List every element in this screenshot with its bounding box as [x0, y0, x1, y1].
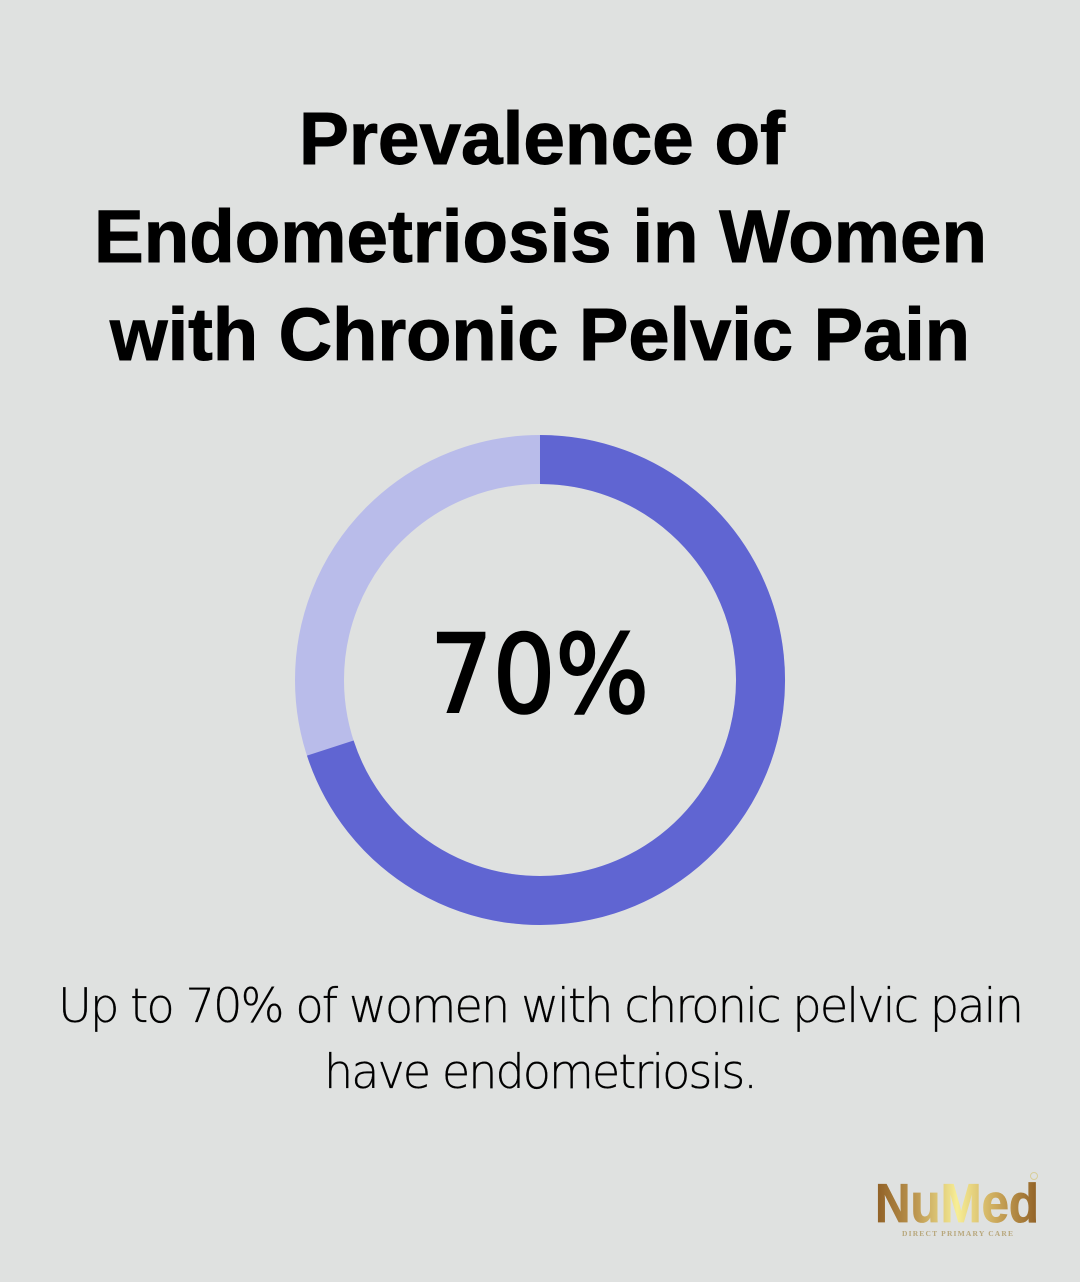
title: with Chronic Pelvic Pain — [109, 293, 970, 376]
description text — [58, 979, 1022, 1100]
donut center value: 70% — [430, 613, 649, 738]
logo registered mark — [1030, 1172, 1038, 1180]
title: Endometriosis in Women — [94, 195, 987, 278]
description text: Up to 70% of women with chronic pelvic pain — [58, 979, 1022, 1034]
title — [94, 97, 987, 376]
logo: NuMed: NuMed — [875, 1172, 1039, 1234]
donut chart: 70% — [320, 460, 761, 900]
title: Prevalence of — [299, 97, 785, 180]
description text: have endometriosis. — [324, 1045, 756, 1100]
logo tagline: DIRECT PRIMARY CARE — [902, 1229, 1013, 1238]
